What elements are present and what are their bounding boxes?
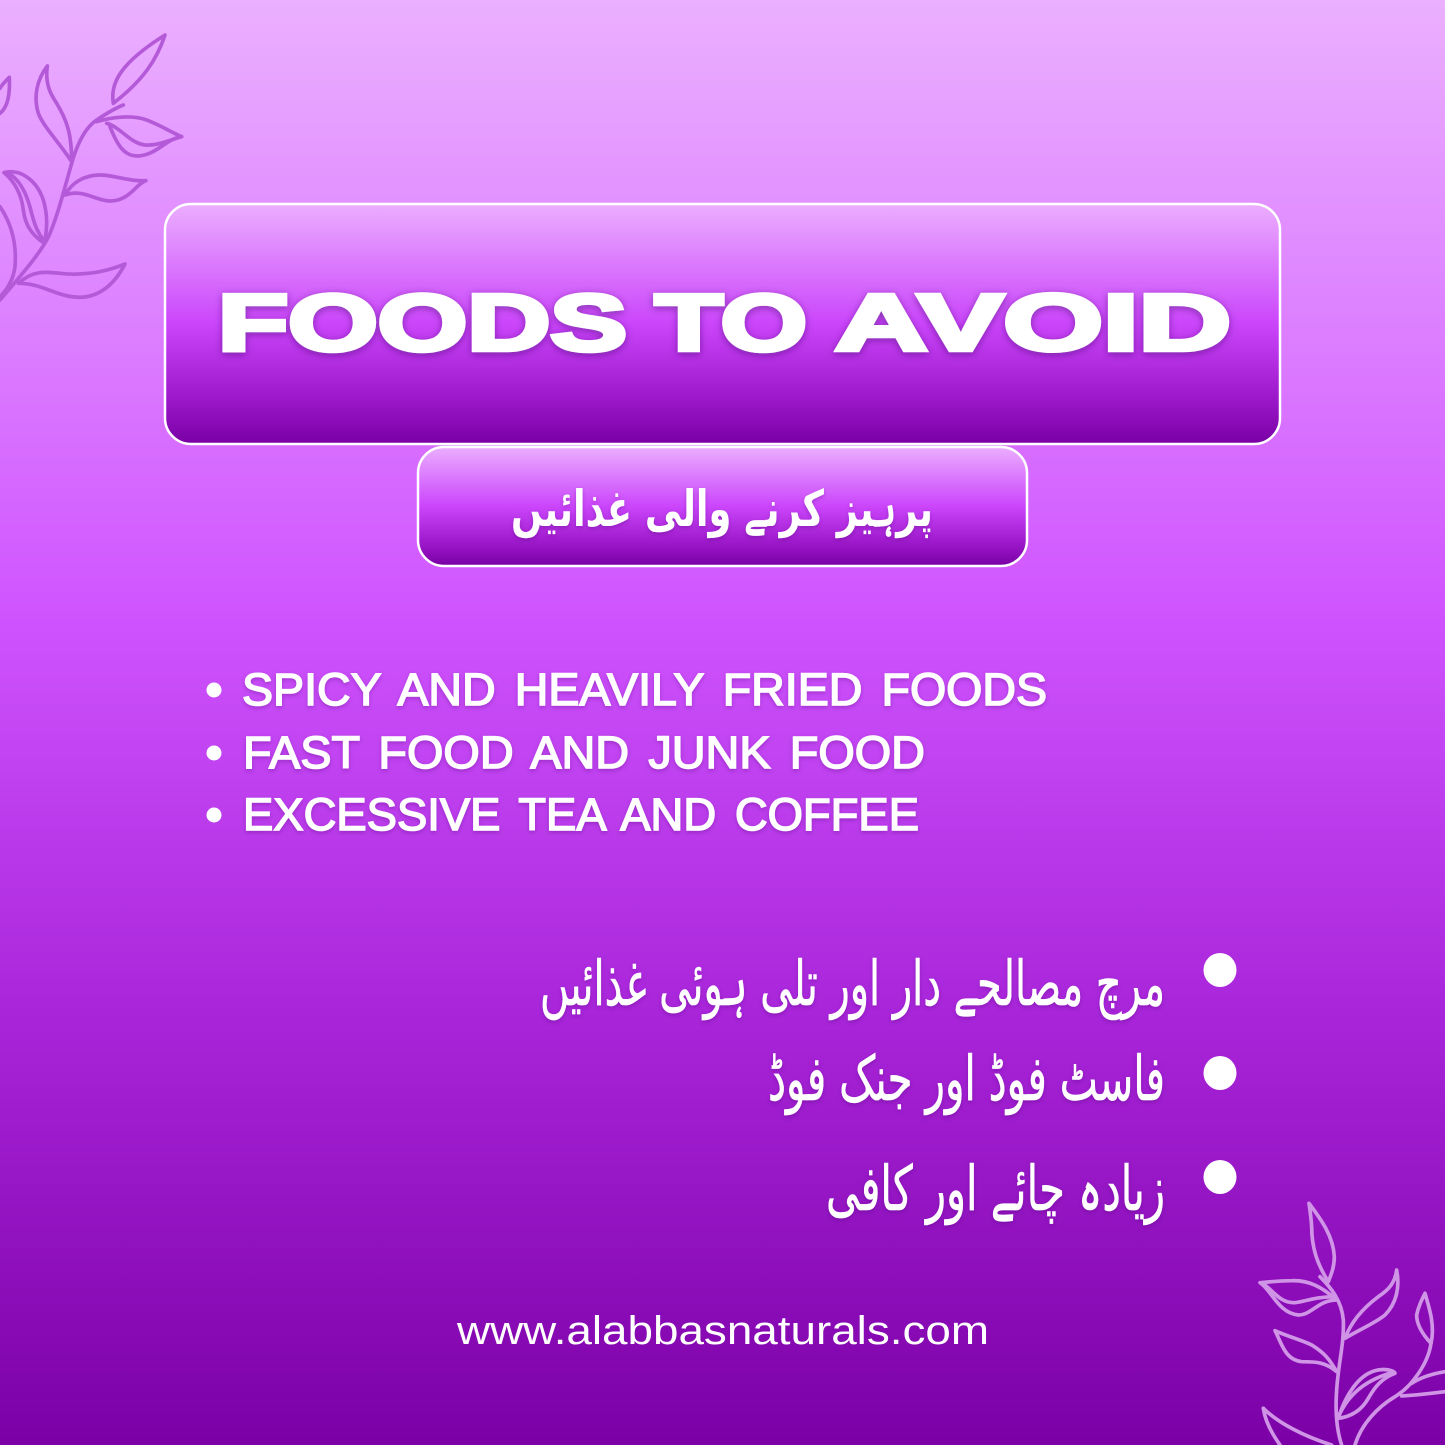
list item: tea and coffee: EXCESSIVE TEA AND COFFEE	[243, 789, 919, 840]
Urdu bullet list	[540, 947, 1236, 1225]
English bullet list	[206, 664, 1047, 840]
Urdu subtitle text: پرہیز کرنے والی غذائیں	[511, 480, 933, 539]
Urdu item: tea and coffee: زیادہ چائے اور کافی	[826, 1152, 1165, 1225]
title: FOODS	[218, 278, 627, 367]
title: TO	[655, 278, 807, 367]
website URL: www.alabbasnaturals.com	[456, 1309, 989, 1353]
icon: bottom-right leaf branch	[1260, 1203, 1445, 1445]
title: AVOID	[835, 278, 1231, 367]
list item: fast food: FAST FOOD AND JUNK FOOD	[243, 727, 925, 778]
list item: spicy foods: SPICY AND HEAVILY FRIED FOODS	[242, 664, 1047, 715]
panel: Urdu subtitle	[418, 447, 1027, 566]
Urdu item: fast food: فاسٹ فوڈ اور جنک فوڈ	[768, 1042, 1165, 1115]
panel: main title	[165, 204, 1280, 444]
icon: top-left leaf branch	[0, 35, 182, 300]
